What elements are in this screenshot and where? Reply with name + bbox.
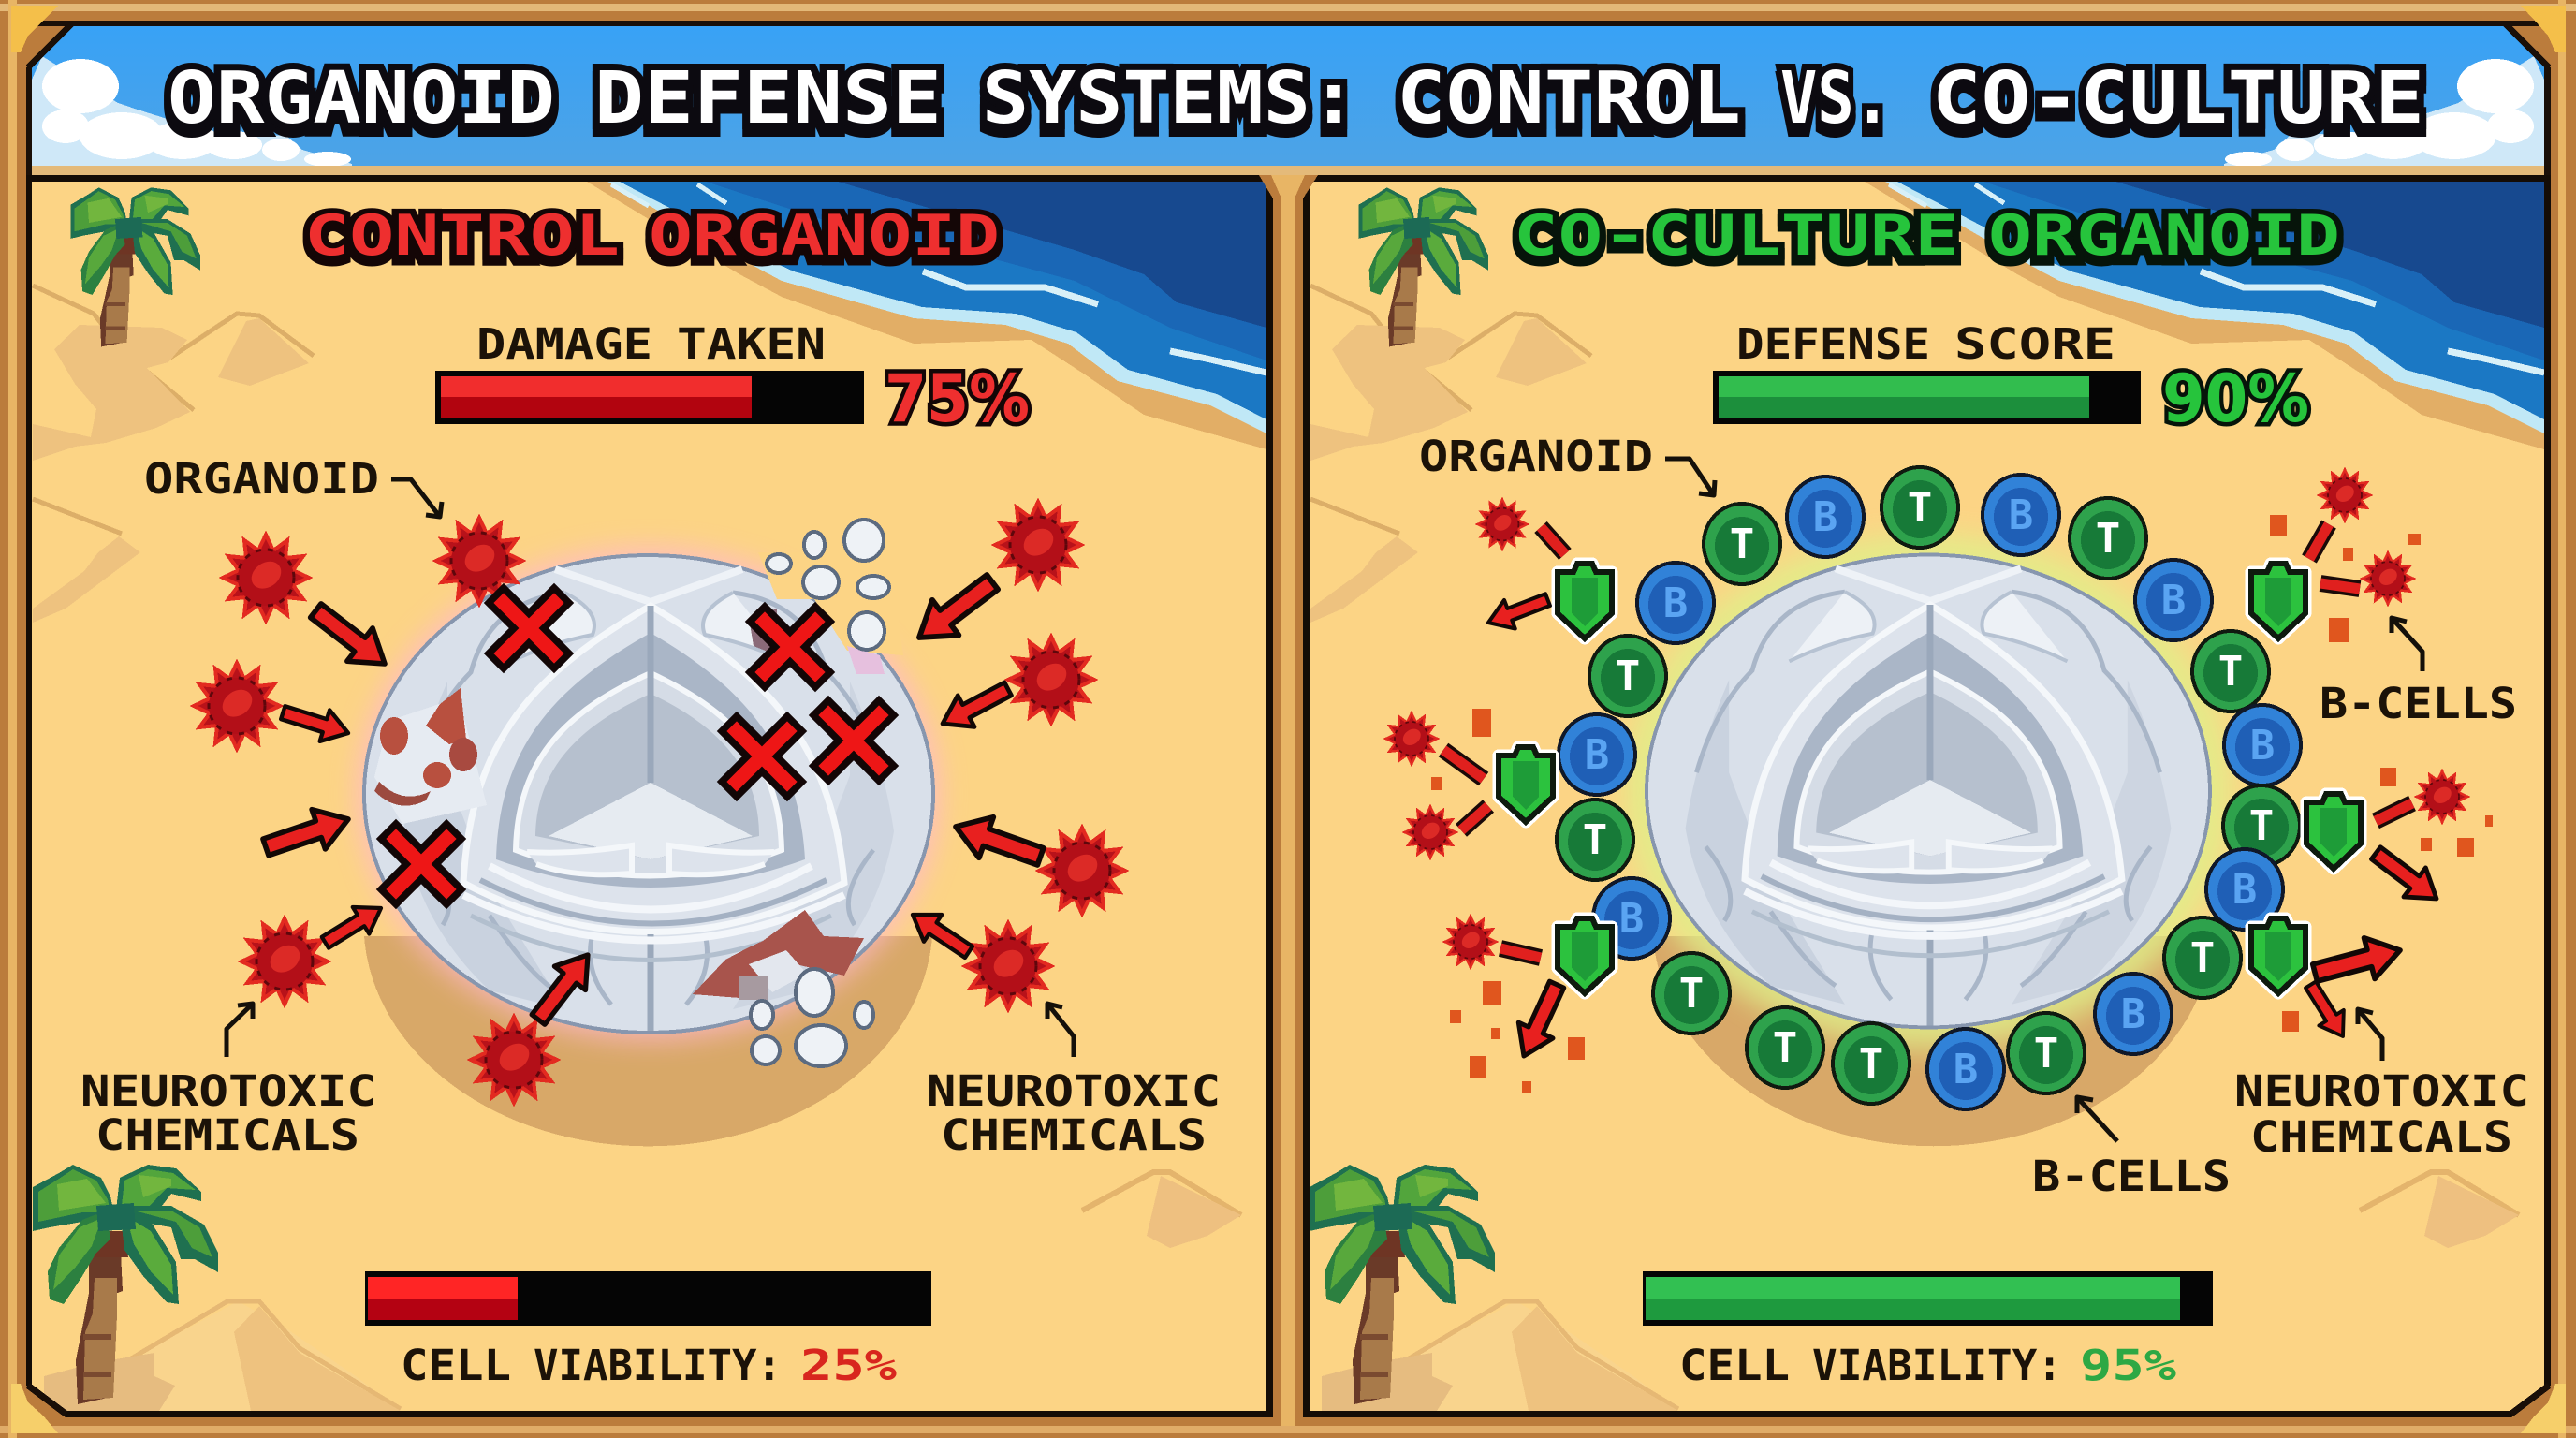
- cell viability text: VIABILITY:: [1812, 1341, 2062, 1390]
- defense score label: SCORE: [1954, 319, 2115, 369]
- palm tree top: [70, 187, 200, 346]
- sand shadow: [364, 936, 932, 1146]
- t-cell: T: [1908, 484, 1932, 532]
- panel: co-culture organoid: [1303, 175, 2551, 1417]
- b-cell: [1559, 714, 1635, 795]
- t-cell: T: [1616, 653, 1640, 700]
- beach background control: [32, 182, 1266, 1411]
- t-cell: [1833, 1023, 1910, 1104]
- organoid damaged: [364, 552, 933, 1033]
- pointer: neurotoxic left: [227, 1004, 253, 1057]
- b-cell: B: [2161, 577, 2186, 624]
- b-cell: B: [1585, 731, 1609, 779]
- panel: control organoid: [26, 175, 1273, 1417]
- t-cell: T: [1679, 970, 1704, 1018]
- protective glow: [1624, 534, 2232, 1049]
- t-cell: [1653, 953, 1730, 1034]
- cell viability text: CELL: [401, 1341, 511, 1390]
- b-cell: B: [2232, 866, 2257, 914]
- title: CO-CULTURE: [1932, 57, 2424, 140]
- t-cell: T: [2034, 1030, 2058, 1078]
- defense bar: [1713, 371, 2141, 424]
- label: chemicals left: CHEMICALS: [95, 1110, 359, 1160]
- label: b-cells lower: B-CELLS: [2032, 1152, 2231, 1201]
- damage patches left: [374, 688, 487, 824]
- title: SYSTEMS:: [982, 57, 1357, 140]
- debris fragments: [751, 520, 889, 1066]
- b-cell: B: [2121, 990, 2145, 1038]
- t-cell: [1589, 636, 1666, 716]
- attack arrows: [259, 565, 1047, 1032]
- cell viability text: VIABILITY:: [534, 1341, 782, 1390]
- deflection dashes: [1443, 524, 2412, 958]
- title: [168, 57, 2424, 140]
- shields: [1499, 564, 2361, 993]
- t-cell: T: [1730, 521, 1754, 568]
- t-cell: [1881, 467, 1958, 548]
- b-cell: [2224, 705, 2301, 785]
- t-cell: [2192, 631, 2269, 712]
- t-cell: [2223, 785, 2300, 866]
- t-cell: T: [2190, 934, 2215, 982]
- debris fragments: [1431, 515, 2493, 1093]
- palm tree top right panel: [1358, 187, 1488, 346]
- label: chemicals right: CHEMICALS: [941, 1110, 1207, 1160]
- label: neurotoxic chemicals left: NEUROTOXIC: [80, 1066, 376, 1116]
- b-cell: B: [1619, 895, 1644, 943]
- b-cell: B: [1663, 580, 1688, 627]
- cell viability bar: [365, 1271, 931, 1326]
- label: b-cells upper: B-CELLS: [2320, 679, 2517, 728]
- defense score label: DEFENSE: [1736, 319, 1930, 369]
- organoid healthy: [1647, 555, 2210, 1027]
- damage bar: [435, 371, 864, 424]
- heading: control organoid: ORGANOID: [649, 203, 1000, 269]
- t-cell: [2164, 917, 2241, 998]
- cell viability text: [1679, 1341, 2062, 1390]
- defense score label: [1736, 319, 2115, 369]
- deflected arrows: [1483, 585, 2448, 1064]
- b-cell: [1637, 563, 1714, 643]
- damage taken label: DAMAGE: [476, 319, 652, 369]
- label: neurotoxic: NEUROTOXIC: [2234, 1066, 2529, 1116]
- sand shadow: [1653, 936, 2214, 1146]
- heading: co-culture organoid: [1514, 203, 2340, 269]
- title: ORGANOID: [168, 57, 555, 140]
- b-cell: B: [1954, 1046, 1978, 1093]
- cell viability value: 95%: [2080, 1341, 2176, 1390]
- pointer: neurotoxic right: [1047, 1004, 1074, 1057]
- t-cell: T: [2249, 802, 2274, 850]
- damage taken label: [476, 319, 826, 369]
- t-cell: [1747, 1007, 1823, 1088]
- b-cell: [1983, 475, 2059, 555]
- missing chunk upper right: [758, 552, 903, 655]
- x damage marks: [396, 603, 879, 889]
- heading: co-culture organoid: ORGANOID: [1988, 203, 2340, 269]
- b-cell: [1787, 477, 1864, 557]
- damage percentage: 75%: [885, 360, 1030, 437]
- t-cell: T: [2096, 515, 2120, 563]
- damage patch lower right: [693, 910, 864, 1000]
- title: DEFENSE: [594, 57, 942, 140]
- heading: co-culture organoid: CO-CULTURE: [1514, 203, 1959, 269]
- t-cell: T: [1859, 1040, 1883, 1088]
- b-cell: [2135, 560, 2212, 640]
- label: chemicals: CHEMICALS: [2250, 1112, 2512, 1162]
- cell viability text: CELL: [1679, 1341, 1790, 1390]
- damage taken label: TAKEN: [677, 319, 826, 369]
- heading: control organoid: [304, 203, 1000, 269]
- cell viability value: 25%: [800, 1341, 897, 1390]
- title: CONTROL: [1397, 57, 1741, 140]
- label: neurotoxic chemicals right: NEUROTOXIC: [927, 1066, 1221, 1116]
- clouds right: [2224, 56, 2544, 167]
- immune cell ring: [1557, 467, 2301, 1109]
- damage glow: [357, 547, 941, 1041]
- t-cell: [2008, 1013, 2085, 1093]
- label: organoid: ORGANOID: [144, 454, 379, 504]
- palm tree bottom: [33, 1165, 218, 1404]
- t-cell: [2070, 498, 2146, 579]
- b-cell: [2095, 974, 2172, 1054]
- pointer: b-cells upper: [2392, 618, 2422, 671]
- sky banner: [32, 26, 2544, 175]
- beach background co-culture: [1310, 182, 2544, 1411]
- divider flare: [1259, 175, 1318, 198]
- small neutralised viruses: [1385, 469, 2468, 968]
- t-cell: [1557, 800, 1633, 880]
- defense percentage: 90%: [2162, 360, 2309, 437]
- b-cell: B: [2250, 722, 2275, 770]
- b-cell: [2206, 849, 2283, 930]
- pointer: organoid: [1665, 459, 1715, 495]
- clouds left: [32, 56, 352, 167]
- pointer: organoid: [391, 479, 442, 517]
- pointer: neurotoxic: [2358, 1009, 2382, 1061]
- cell viability text: [401, 1341, 782, 1390]
- pointer: b-cells lower: [2077, 1097, 2117, 1141]
- palm tree bottom right panel: [1310, 1165, 1495, 1404]
- b-cell: B: [1813, 493, 1837, 541]
- title: VS.: [1780, 57, 1891, 140]
- b-cell: [1593, 878, 1670, 959]
- b-cell: B: [2009, 492, 2033, 539]
- neurotoxic virus particles: [194, 502, 1125, 1103]
- b-cell: [1927, 1029, 2004, 1109]
- t-cell: T: [2218, 648, 2243, 696]
- label: organoid: ORGANOID: [1419, 432, 1653, 481]
- t-cell: T: [1773, 1024, 1797, 1072]
- heading: control organoid: CONTROL: [304, 203, 620, 269]
- cell viability bar: [1643, 1271, 2213, 1326]
- t-cell: [1704, 504, 1780, 584]
- t-cell: T: [1583, 816, 1607, 864]
